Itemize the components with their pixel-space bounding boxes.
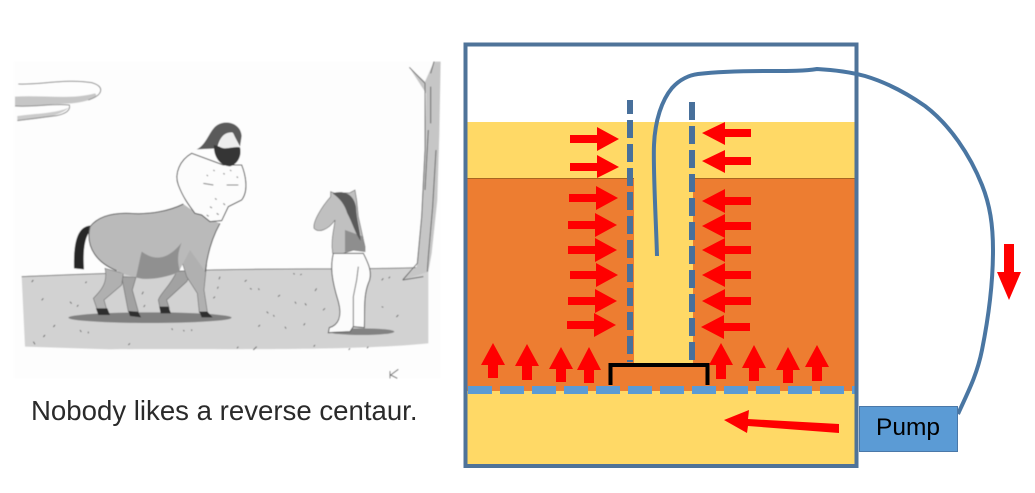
ground bbox=[22, 267, 428, 349]
arrows: inward from left bbox=[567, 127, 619, 337]
horse-man shadow bbox=[329, 328, 394, 335]
centaur body bbox=[89, 204, 220, 278]
left well wall bbox=[627, 100, 633, 362]
horse-man chest shade bbox=[345, 230, 365, 252]
centaur belly shade bbox=[136, 243, 182, 279]
far legs bbox=[122, 270, 193, 312]
outer tank frame bbox=[466, 44, 856, 466]
centaur tail bbox=[74, 226, 90, 269]
arrow: flow from pump into reservoir bbox=[724, 410, 839, 433]
signature bbox=[390, 369, 398, 378]
black bracket bbox=[610, 365, 708, 385]
layer boundary bbox=[466, 178, 856, 179]
caption: Nobody likes a reverse centaur. bbox=[31, 395, 418, 426]
centaur body outline bbox=[89, 204, 220, 272]
cartoon paper background bbox=[14, 62, 441, 378]
centaur chest hair bbox=[203, 170, 238, 216]
right well wall bbox=[689, 102, 695, 362]
tree bbox=[403, 62, 441, 280]
bottom yellow reservoir bbox=[466, 391, 856, 466]
arrow: flow down pipe bbox=[997, 244, 1021, 300]
bottom dashed membrane bbox=[468, 386, 856, 394]
horse-man leg divide bbox=[353, 267, 358, 327]
horse-man mane bbox=[333, 192, 361, 241]
near legs bbox=[93, 243, 207, 313]
hand-drawn pipe bbox=[654, 69, 993, 414]
centaur hair bbox=[197, 122, 242, 149]
centaur torso bbox=[177, 153, 246, 222]
arrows: inward from right bbox=[701, 122, 751, 339]
centaur shadow bbox=[68, 312, 232, 323]
middle orange layer bbox=[466, 179, 856, 391]
horse-man legs bbox=[328, 253, 370, 333]
upper yellow layer bbox=[466, 122, 856, 179]
centaur hooves bbox=[96, 307, 213, 317]
horizon line bbox=[22, 267, 423, 277]
horse-man head and neck bbox=[314, 190, 365, 253]
centaur beard bbox=[214, 145, 241, 166]
ground speckles bbox=[32, 273, 398, 350]
central well column bbox=[634, 122, 693, 363]
pump box: Pump bbox=[876, 414, 940, 441]
panel: reverse centaur cartoon bbox=[14, 62, 441, 378]
panel: pump diagram bbox=[466, 44, 1021, 466]
clouds bbox=[15, 81, 101, 121]
arrows: upward through membrane bbox=[481, 343, 829, 383]
centaur face bbox=[219, 133, 239, 154]
pump box bbox=[860, 406, 958, 452]
